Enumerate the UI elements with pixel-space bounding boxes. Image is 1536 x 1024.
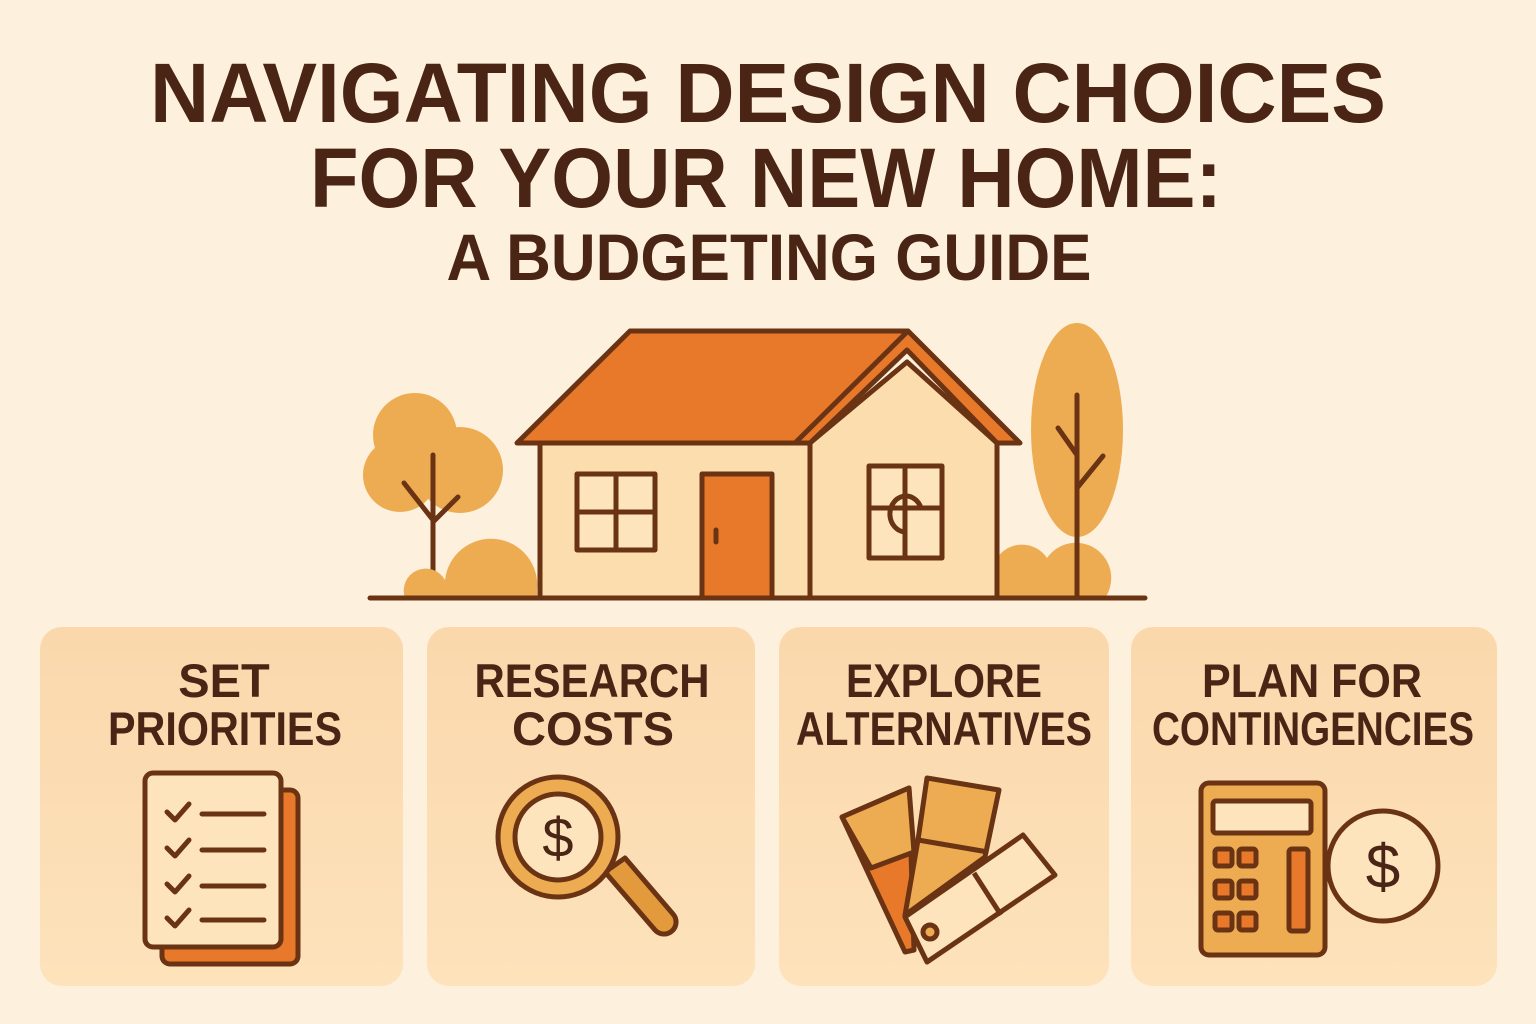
icon: checklist [145,773,298,964]
ground line [370,596,1145,600]
panel: explore alternatives: ALTERNATIVES [796,702,1092,755]
panel: set priorities: SET [178,654,270,707]
title: FOR YOUR NEW HOME: [310,131,1222,225]
windows and door [577,474,655,550]
panel: set priorities: PRIORITIES [108,702,342,755]
panel: research costs [427,627,755,986]
panel: plan for contingencies: CONTINGENCIES [1152,702,1474,755]
icon: colour swatches [842,778,1055,962]
title [150,46,1386,294]
panel: research costs: RESEARCH [474,654,710,707]
title: A BUDGETING GUIDE [446,220,1092,294]
illustration: house with trees [363,323,1145,598]
icon: calculator and coin: $ [1366,833,1400,902]
title: NAVIGATING DESIGN CHOICES [150,46,1386,140]
panel: explore alternatives [779,627,1109,986]
house walls [540,443,810,598]
bushes [404,539,1111,598]
icon: right tree [1031,323,1123,598]
icon: calculator and coin [1201,783,1438,955]
icon: left tree [363,393,503,598]
panel: plan for contingencies [1131,627,1497,986]
icon: magnifier with dollar: $ [542,806,574,869]
roof [517,331,908,443]
panel: set priorities [40,627,403,986]
icon: magnifier with dollar [498,777,676,934]
panel: explore alternatives: EXPLORE [846,654,1042,707]
panel: plan for contingencies: PLAN FOR [1202,654,1422,707]
panel: research costs: COSTS [512,702,674,755]
